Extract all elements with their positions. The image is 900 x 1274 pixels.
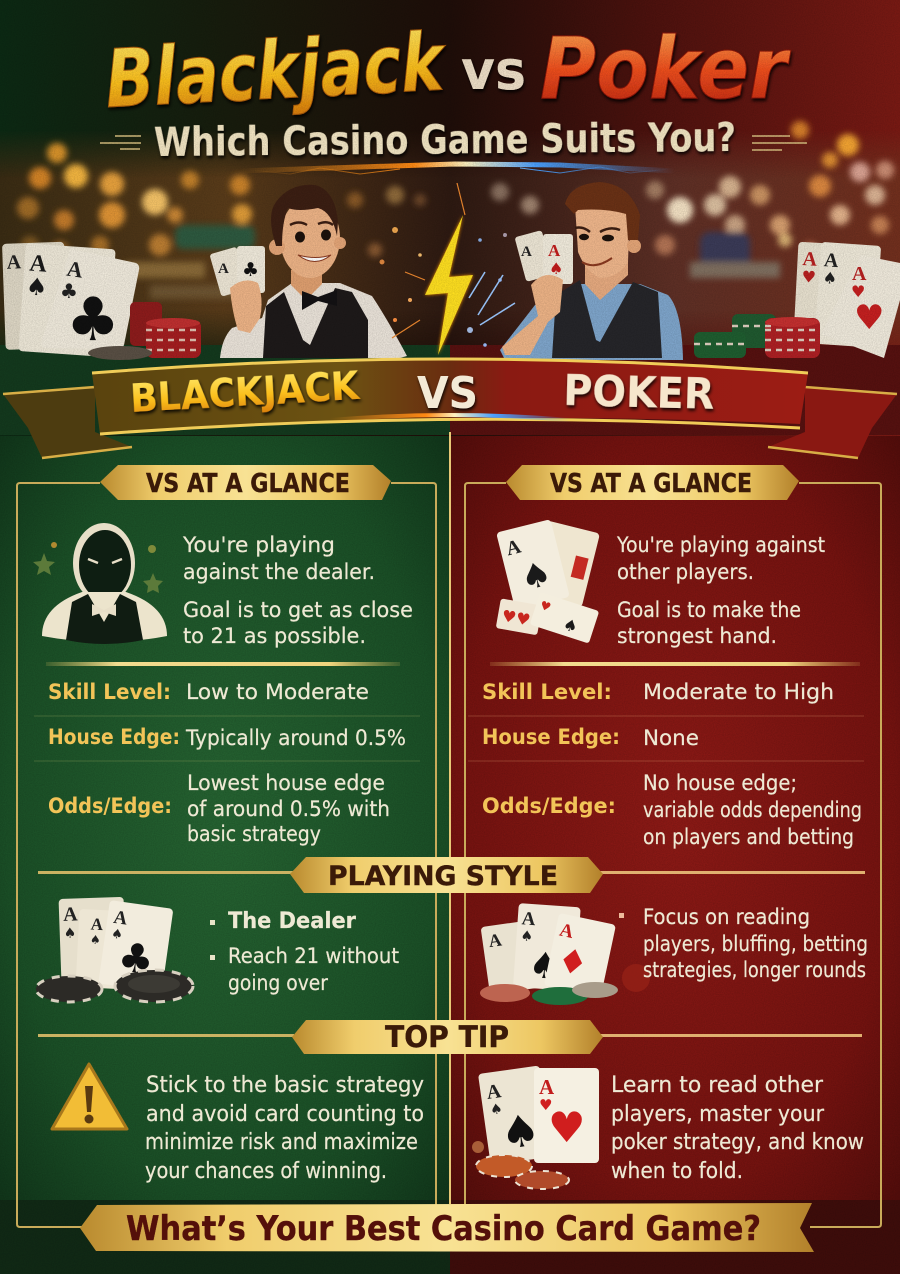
icon: warning triangle (52, 1064, 127, 1129)
left tip text: your chances of winning. (145, 1159, 387, 1184)
icon: cards and mixed chips: A (521, 908, 536, 930)
icon: black chips and cards: A (63, 903, 78, 926)
bokeh casino lights (17, 121, 894, 299)
right tip text (611, 1073, 864, 1184)
row: odds and edge: No house edge; (643, 771, 797, 795)
left playing style list: The Dealer (228, 909, 356, 934)
right glance ribbon: VS AT A GLANCE (550, 469, 752, 499)
row: house edge: None (643, 726, 699, 750)
icon: cards and mixed chips: ♠ (520, 928, 534, 945)
icon: black chips and cards: ♣ (115, 934, 157, 985)
row: odds and edge: basic strategy (187, 822, 321, 846)
cards held: ♠ (549, 259, 563, 278)
right tip text: poker strategy, and know (611, 1130, 864, 1155)
cards held: A (521, 244, 532, 260)
top tip heading (38, 1020, 862, 1054)
card: big ace of hearts (821, 255, 900, 358)
right glance text: You're playing against (616, 533, 825, 557)
top tip heading: TOP TIP (385, 1020, 509, 1054)
right playing style list: strategies, longer rounds (643, 958, 866, 982)
cards held (209, 246, 265, 297)
right glance text (616, 533, 825, 648)
left playing style list (210, 909, 399, 995)
spark line (330, 415, 570, 420)
card: ace of spades (814, 242, 881, 348)
right glance text: other players. (617, 560, 754, 584)
banner text: VS: VS (417, 368, 478, 419)
subtitle: Which Casino Game Suits You? (154, 115, 736, 166)
left playing style list: Reach 21 without (228, 944, 399, 968)
left panel green felt (0, 436, 449, 1201)
row: skill level: Moderate to High (643, 680, 834, 704)
lightning bolt (392, 183, 515, 355)
head (280, 198, 340, 278)
banner text: POKER: POKER (563, 366, 715, 420)
left tip text (145, 1073, 424, 1184)
card: ace of spades (18, 243, 116, 357)
left glance text: You're playing (182, 533, 335, 557)
shirt and arms (500, 284, 683, 360)
icon: black chips and cards: A (112, 907, 129, 930)
right playing style list: players, bluffing, betting (643, 932, 868, 956)
main ribbon banner (3, 359, 897, 458)
icon: cards and mixed chips: A (487, 929, 503, 951)
icon: cards and mixed chips: ♦ (553, 940, 592, 985)
right stats table (468, 680, 864, 849)
title word: Poker: Poker (540, 19, 791, 119)
banner text: BLACKJACK: BLACKJACK (129, 364, 362, 422)
title word: vs: vs (461, 39, 526, 102)
icon: black chips and cards: ♠ (90, 932, 101, 947)
row: house edge: House Edge: (482, 725, 620, 749)
row: odds and edge: of around 0.5% with (187, 797, 390, 821)
card back: A (6, 251, 22, 274)
row: skill level: Low to Moderate (186, 680, 369, 704)
right glance ribbon (506, 465, 799, 500)
title word: Blackjack: Blackjack (103, 15, 449, 126)
icon: dealer silhouette (33, 523, 167, 644)
vest (552, 280, 662, 358)
neck (585, 258, 628, 300)
bottom call-to-action ribbon: What’s Your Best Casino Card Game? (126, 1209, 761, 1249)
spark line top (240, 164, 675, 174)
cards left top (2, 242, 139, 357)
left glance text: to 21 as possible. (183, 624, 366, 648)
right tip text: Learn to read other (611, 1073, 824, 1098)
card: ace of spades: A (29, 251, 48, 278)
left tip text: and avoid card counting to (146, 1102, 424, 1127)
chips left top (88, 302, 201, 360)
card: ace of spades: ♠ (822, 268, 838, 288)
face details (575, 228, 620, 265)
title (103, 15, 791, 126)
right glance text: Goal is to make the (617, 598, 801, 622)
poker player character (500, 182, 683, 360)
row: odds and edge (482, 771, 862, 849)
cards left top: A (65, 256, 85, 283)
hand and cuff (230, 280, 262, 333)
row: house edge (48, 725, 406, 750)
cards right top: ♥ (854, 298, 884, 338)
icon: tip cards and chips: ♠ (489, 1101, 504, 1119)
cards right top: ♥ (851, 282, 865, 301)
row: skill level: Skill Level: (48, 680, 171, 704)
left glance text (182, 533, 413, 648)
right playing style list (619, 905, 868, 982)
row: odds and edge (48, 771, 390, 846)
card: ace of hearts: A (802, 248, 818, 271)
left glance ribbon: VS AT A GLANCE (146, 469, 350, 499)
row: house edge (482, 725, 699, 750)
card: ace of spades: ♠ (25, 272, 48, 302)
icon: tip cards and chips: A (539, 1075, 555, 1099)
right playing style list: Focus on reading (643, 905, 810, 929)
icon: black chips and cards: ♠ (110, 927, 124, 943)
dealer character (209, 185, 407, 358)
icon: cards and dice: A (504, 535, 524, 560)
icon: black chips and cards: ♠ (63, 925, 77, 942)
left glance ribbon (100, 465, 391, 500)
icon: tip cards and chips: A (485, 1080, 503, 1104)
icon: tip cards and chips (472, 1065, 599, 1189)
face details (290, 222, 333, 262)
right panel red felt (451, 436, 900, 1201)
row: odds and edge: Odds/Edge: (482, 794, 616, 818)
neck (291, 268, 322, 300)
footer strip (0, 1200, 900, 1274)
centre divider (449, 432, 451, 1204)
left playing style list: going over (228, 971, 328, 995)
cards left top: ♣ (60, 279, 78, 303)
row: odds and edge: on players and betting (643, 825, 854, 849)
cards held: ♣ (242, 259, 259, 281)
chips right top (694, 314, 820, 358)
icon: cards and dice: ♠ (561, 614, 580, 637)
row: skill level (48, 680, 369, 704)
card: ace of hearts: ♥ (801, 267, 817, 287)
shirt and arms (220, 283, 407, 358)
hand and forearm (502, 275, 563, 355)
vest (263, 288, 368, 358)
hair (271, 185, 338, 246)
cards held: A (548, 241, 561, 260)
icon: cards and mixed chips: A (558, 920, 576, 943)
icon: tip cards and chips: ♥ (539, 1096, 552, 1114)
left tip text: Stick to the basic strategy (146, 1073, 424, 1098)
icon: cards and dice: ♥ (538, 598, 553, 615)
card: ace of spades: A (823, 249, 840, 272)
hair (565, 182, 640, 240)
icon: cards and dice (496, 519, 600, 644)
card: ace of clubs (41, 249, 139, 349)
right tip text: when to fold. (611, 1159, 743, 1184)
row: house edge: House Edge: (48, 725, 180, 749)
row: odds and edge: Lowest house edge (187, 771, 385, 795)
cards left top: ♣ (66, 285, 120, 355)
cards held: A (218, 261, 229, 277)
left tail (3, 387, 132, 458)
left tip text: minimize risk and maximize (145, 1130, 418, 1155)
row: skill level: Skill Level: (482, 680, 612, 704)
cards held (515, 230, 573, 284)
icon: cards and dice: ♠ (516, 553, 556, 599)
right tip text: players, master your (611, 1102, 825, 1127)
icon: cards and mixed chips: ♠ (527, 945, 562, 988)
background (0, 0, 900, 436)
centre sparks (380, 227, 507, 347)
icon: tip cards and chips: ♠ (497, 1104, 543, 1160)
icon: black chips and cards (36, 897, 193, 1002)
bow tie (302, 290, 337, 310)
row: house edge: Typically around 0.5% (185, 726, 406, 750)
icon: black chips and cards: A (90, 915, 104, 934)
left glance text: against the dealer. (183, 560, 375, 584)
left stats table (34, 680, 420, 846)
left glance text: Goal is to get as close (183, 598, 413, 622)
icon: cards and mixed chips (480, 903, 650, 1005)
panel borders (17, 483, 881, 1227)
head (575, 205, 630, 278)
playing style heading: PLAYING STYLE (328, 861, 558, 892)
cards right top: A (852, 263, 867, 285)
row: odds and edge: variable odds depending (643, 798, 862, 822)
right tail (768, 387, 897, 458)
card: ace of hearts (793, 242, 848, 342)
icon: tip cards and chips: ♥ (548, 1103, 586, 1152)
cards right top (793, 242, 900, 358)
row: odds and edge: Odds/Edge: (48, 794, 172, 818)
row: skill level (482, 680, 834, 704)
centre band (92, 359, 808, 434)
playing style heading (38, 857, 865, 893)
icon: cards and dice: ♥♥ (500, 606, 532, 630)
right glance text: strongest hand. (617, 624, 777, 648)
